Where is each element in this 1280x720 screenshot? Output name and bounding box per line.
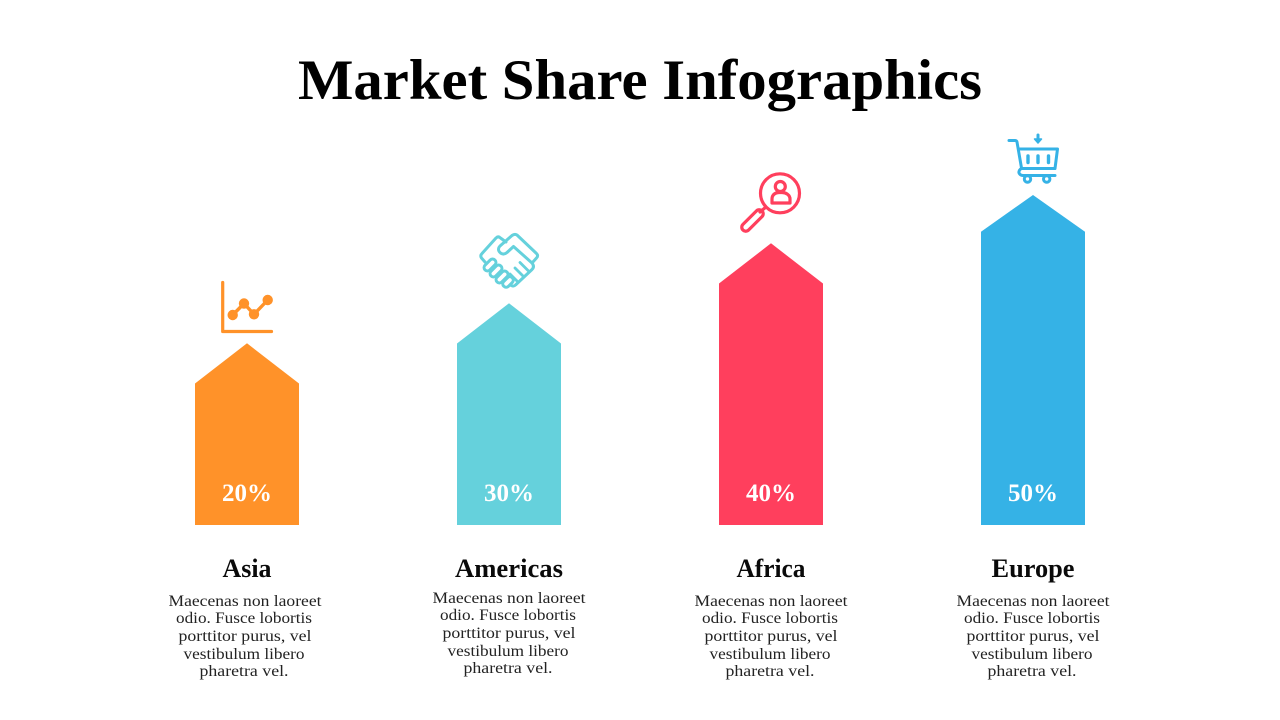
panel: Europe xyxy=(956,135,1110,680)
panel: Africa xyxy=(694,174,848,680)
value: 50%: 50% xyxy=(1008,480,1058,507)
text block: Africa: vestibulum libero xyxy=(710,646,830,663)
text block: Americas: Maecenas non laoreet xyxy=(432,590,586,607)
panel: Asia xyxy=(168,282,322,680)
heading: Asia: Asia xyxy=(222,554,272,583)
text block: Africa: Maecenas non laoreet xyxy=(694,593,848,610)
text block: Africa: odio. Fusce lobortis xyxy=(702,610,838,627)
text block: Americas: odio. Fusce lobortis xyxy=(440,607,576,624)
bar: Americas 30% xyxy=(457,303,561,525)
value: 40%: 40% xyxy=(746,480,796,507)
text block: Europe xyxy=(956,593,1110,680)
heading: Africa: Africa xyxy=(736,554,806,583)
value: 20%: 20% xyxy=(222,480,272,507)
text block: Europe: pharetra vel. xyxy=(988,663,1076,680)
text block: Africa xyxy=(694,593,848,680)
heading: Europe: Europe xyxy=(992,554,1074,583)
bar: Africa 40% xyxy=(719,243,823,525)
text block: Americas: pharetra vel. xyxy=(464,660,552,677)
text block: Americas: vestibulum libero xyxy=(448,643,568,660)
icon: magnifier with person xyxy=(740,174,800,233)
text block: Asia: pharetra vel. xyxy=(200,663,288,680)
bar: Asia 20% xyxy=(195,343,299,525)
text block: Asia: vestibulum libero xyxy=(184,646,304,663)
text block: Africa: pharetra vel. xyxy=(726,663,814,680)
text block: Europe: porttitor purus, vel xyxy=(966,628,1100,645)
title: Market Share Infographics xyxy=(298,49,982,112)
text block: Africa: porttitor purus, vel xyxy=(704,628,838,645)
text block: Asia: odio. Fusce lobortis xyxy=(176,610,312,627)
bar: Europe 50% xyxy=(981,195,1085,525)
text block: Asia xyxy=(168,593,322,680)
text block: Americas: porttitor purus, vel xyxy=(442,625,576,642)
text block: Europe: vestibulum libero xyxy=(972,646,1092,663)
text block: Europe: odio. Fusce lobortis xyxy=(964,610,1100,627)
value: 30%: 30% xyxy=(484,480,534,507)
panel: Americas xyxy=(432,234,586,677)
text block: Americas xyxy=(432,590,586,677)
text block: Asia: Maecenas non laoreet xyxy=(168,593,322,610)
text block: Asia: porttitor purus, vel xyxy=(178,628,312,645)
heading: Americas: Americas xyxy=(455,554,563,583)
icon: shopping cart xyxy=(1009,135,1058,182)
icon: line chart xyxy=(223,282,273,332)
text block: Europe: Maecenas non laoreet xyxy=(956,593,1110,610)
icon: handshake xyxy=(481,234,538,289)
